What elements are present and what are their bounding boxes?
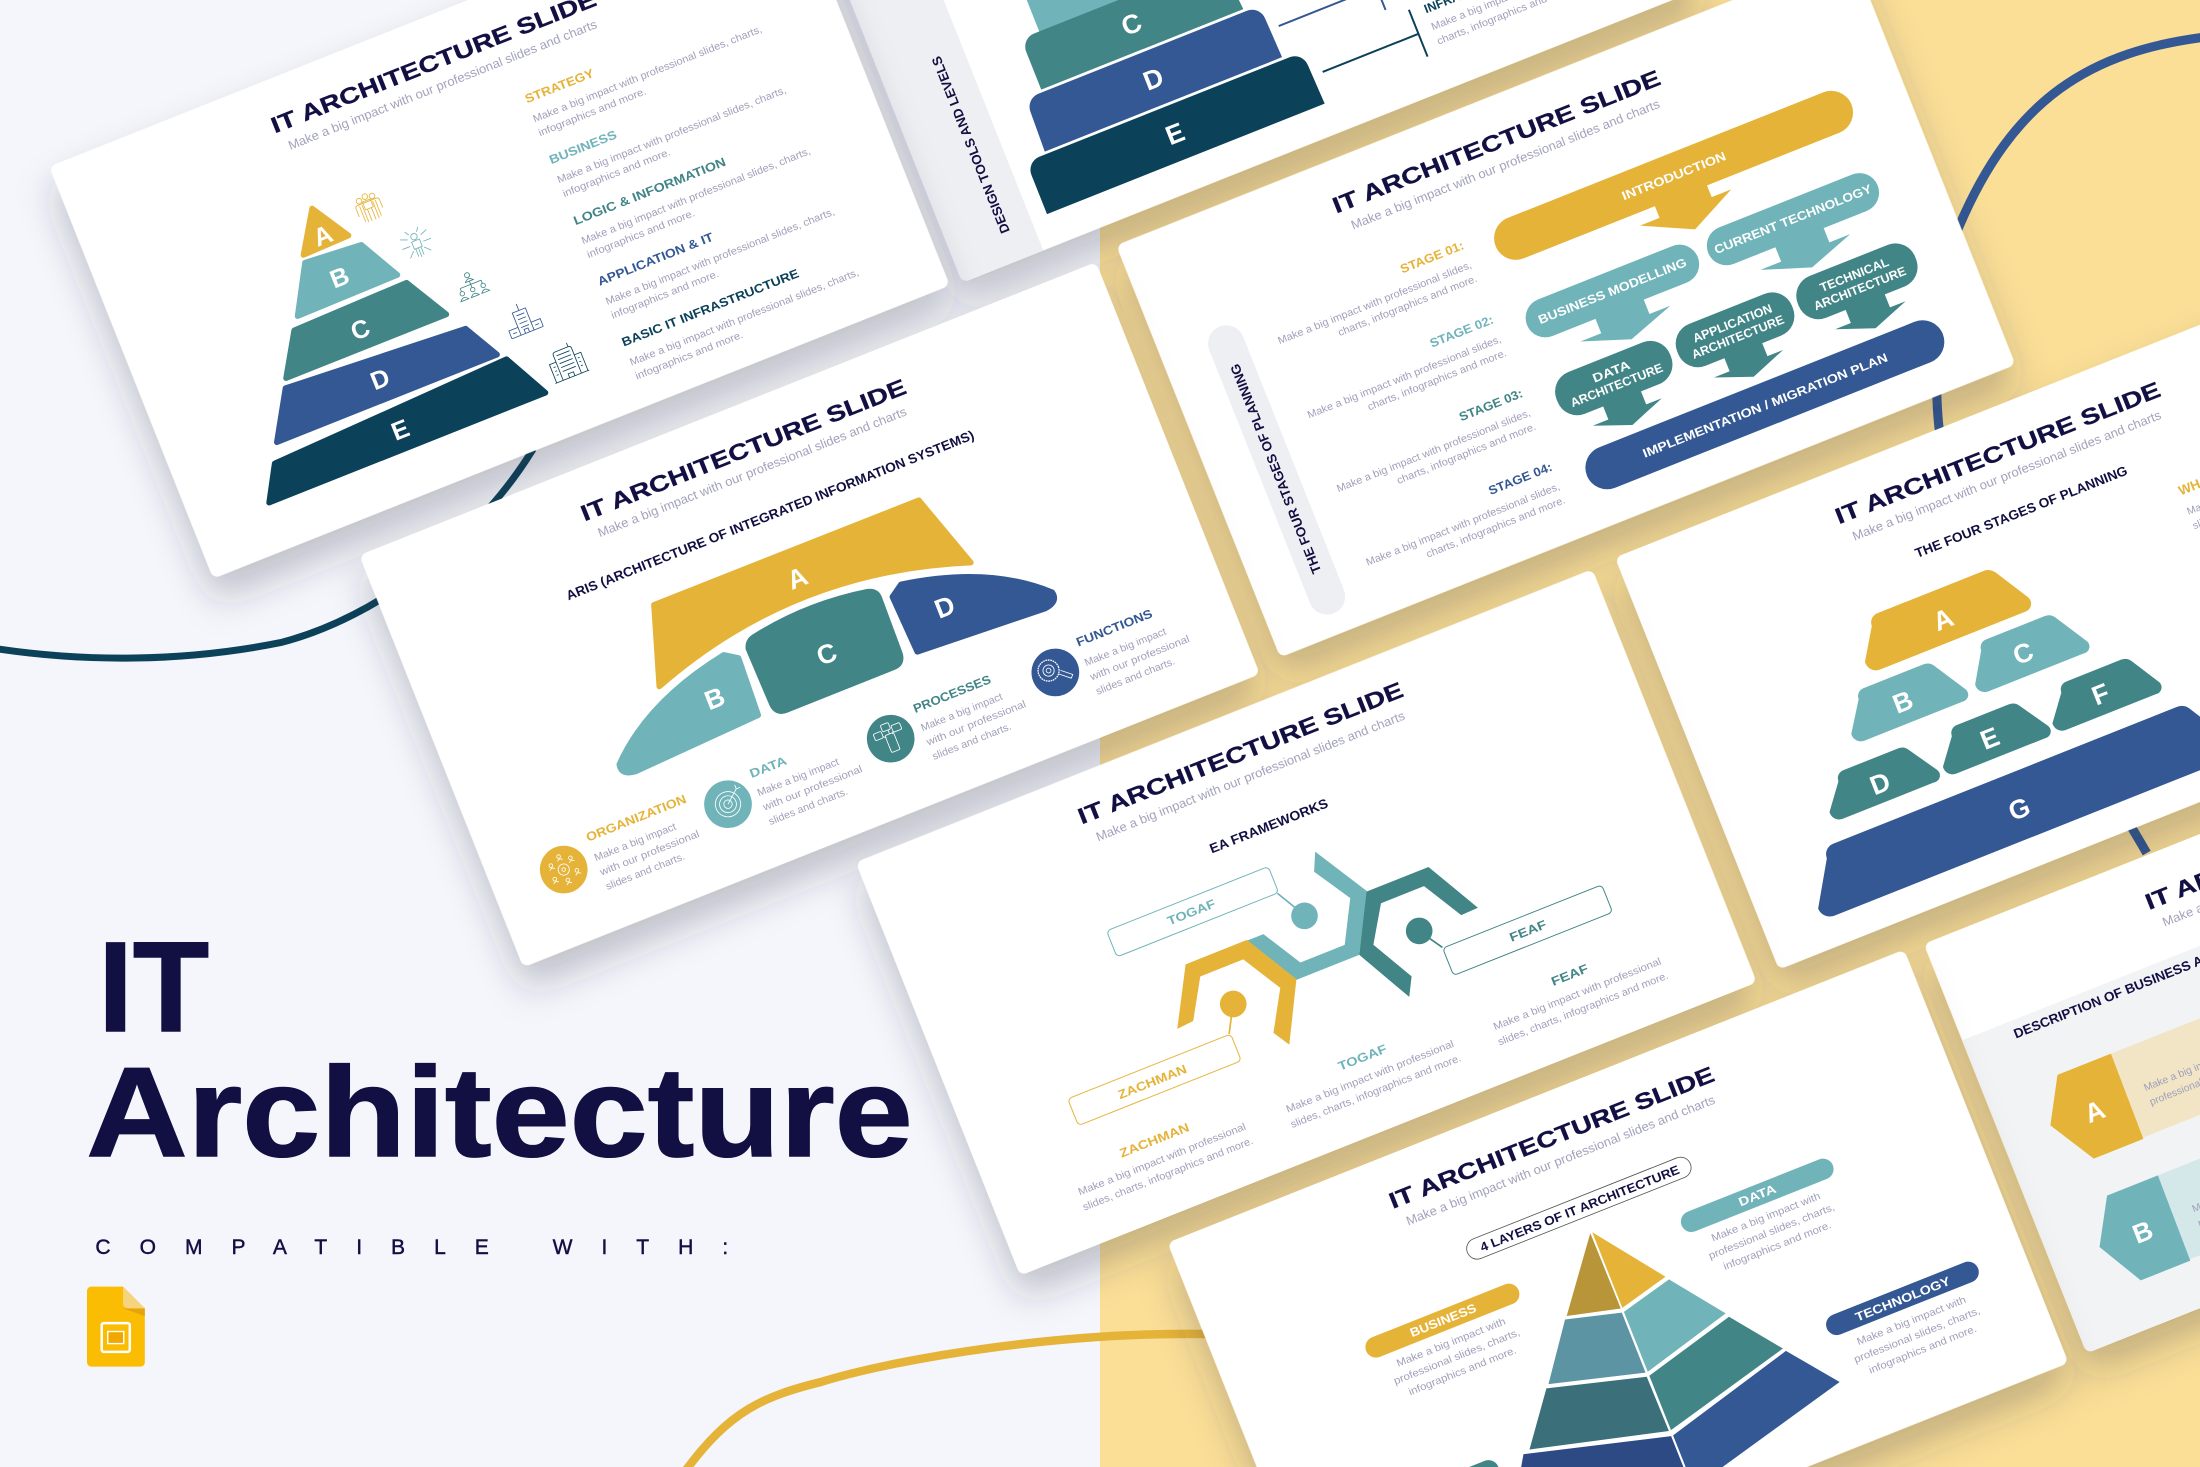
slide subtitle: Make a big impact with our professional slides and charts <box>1349 97 1662 232</box>
icon badge <box>533 839 595 901</box>
block G <box>1798 692 2200 920</box>
side pill <box>1203 320 1351 620</box>
pill: implementation <box>1579 314 1951 496</box>
label: technology <box>1823 1259 2001 1385</box>
panel: design tools and levels slide <box>799 0 1699 283</box>
house diagram <box>569 466 1058 778</box>
letter D: D <box>1139 62 1168 97</box>
letter C: C <box>2009 636 2038 671</box>
letter D: D <box>1866 766 1895 801</box>
heading: STAGE 02: <box>1428 313 1496 351</box>
tier 3 right facet <box>1640 1303 1796 1430</box>
body line 1: Make a big impact with professional slides, <box>1306 334 1503 421</box>
label box: FEAF <box>1443 885 1613 976</box>
block D <box>1817 738 1942 823</box>
label line 1: TECHNICAL <box>1818 255 1891 295</box>
text block: strategy <box>523 2 769 139</box>
heading: LOGIC & INFORMATION <box>571 155 728 228</box>
body line 3: slides and charts. <box>931 721 1013 763</box>
dot <box>1216 987 1251 1021</box>
stage 1 text <box>1268 238 1479 361</box>
panel: four layers slide <box>1168 950 2069 1467</box>
pill text: BUSINESS <box>1408 1301 1478 1340</box>
title line 2: Architecture <box>86 1041 913 1184</box>
body line 1: Make a big impact with <box>1855 1295 1968 1348</box>
decorative curve: blue <box>1937 36 2200 853</box>
letter E: E <box>1161 117 1189 151</box>
text block: application and IT <box>596 185 842 322</box>
panel: four stages flow slide <box>1116 0 2015 657</box>
letter C: C <box>1117 7 1146 42</box>
block F <box>2040 649 2164 734</box>
line <box>1277 887 1304 921</box>
page <box>87 1287 145 1367</box>
slide background <box>1924 651 2200 1353</box>
arrow <box>1830 287 1911 342</box>
body line 2: charts, infographics and more. <box>1396 422 1538 487</box>
item: functions <box>1023 597 1197 718</box>
background: yellow right half <box>1100 0 2200 1467</box>
body line 1: Make a big impact with professional slides, <box>1335 408 1532 495</box>
connector: D <box>1269 0 1386 49</box>
pill <box>1520 239 1705 343</box>
block C <box>1961 605 2092 695</box>
item: organization <box>531 792 708 914</box>
body line 2: with our professional <box>598 829 701 879</box>
slide frame <box>102 1323 130 1352</box>
3D pyramid <box>1428 1168 1856 1467</box>
diagram heading: EA FRAMEWORKS <box>1207 796 1330 856</box>
body line 3: infographics and more. <box>1722 1220 1833 1273</box>
label line 2: ARCHITECTURE <box>1690 313 1786 362</box>
body line 1: Make a big impact with professional slides, <box>1365 482 1562 569</box>
letter A: A <box>310 220 337 253</box>
slide subtitle: Make a big impact with our professional slides and charts <box>596 405 909 540</box>
letter F: F <box>2087 677 2114 711</box>
text block: feaf <box>1482 935 1670 1048</box>
hexagon <box>2034 1054 2145 1169</box>
body line 1: Make a big impact with professional <box>1077 1122 1248 1198</box>
item: data <box>696 729 870 848</box>
body line 2: infographics and more. <box>586 208 697 261</box>
stage 4 text <box>1356 460 1567 582</box>
arrow <box>1708 336 1788 390</box>
icon: people circle <box>544 849 583 889</box>
label: infrastructure <box>1422 0 1633 47</box>
body line 2: charts, infographics and more. <box>1337 274 1479 339</box>
icon badge <box>1024 641 1086 703</box>
diagram heading: THE FOUR STAGES OF PLANNING <box>1913 463 2130 561</box>
tier B <box>1019 0 1203 34</box>
body line 1: Make a big impact <box>593 822 678 864</box>
label line 2: ARCHITECTURE <box>1812 264 1908 313</box>
icon: magnifier <box>1035 653 1074 689</box>
panel: description of business architecture slide <box>1924 651 2200 1353</box>
tier B <box>280 233 398 316</box>
slide subtitle: Make a big impact with our professional slides and charts <box>1850 408 2163 544</box>
diagram heading: ARIS (ARCHITECTURE OF INTEGRATED INFORMATION SYSTEMS) <box>564 427 976 603</box>
letter B: B <box>700 681 729 716</box>
slide title: IT ARCHITECTURE SLIDE <box>577 374 910 526</box>
label line 2: ARCHITECTURE <box>1569 361 1665 410</box>
body line 1: Make a big impact <box>1083 627 1168 669</box>
body line 2: slides, charts, infographics and more. <box>1289 1053 1463 1131</box>
stage 2 text <box>1297 313 1509 435</box>
pill arrow: business modelling <box>1520 239 1717 373</box>
slide background <box>1116 0 2015 657</box>
fold <box>123 1287 145 1308</box>
tier C <box>1021 0 1243 90</box>
slide title: IT ARCHITECTURE SLIDE <box>1385 1062 1718 1214</box>
fold shade <box>123 1308 145 1316</box>
letter C: C <box>347 314 374 346</box>
pyramid <box>174 154 545 503</box>
body line 2: charts, infographics and more. <box>1366 348 1509 413</box>
letter D: D <box>930 590 959 625</box>
body line 2: professional slides, charts, <box>1707 1202 1836 1262</box>
hex connector diagram <box>1135 803 1499 1081</box>
block D <box>889 533 1057 659</box>
body line 2: with our professional <box>1088 634 1191 684</box>
decorative curve: dark teal <box>0 449 533 658</box>
grey band <box>1962 747 2200 1353</box>
label: FEAF: FEAF <box>1507 917 1549 945</box>
pill arrow: current technology <box>1701 167 1897 301</box>
label: TOGAF: TOGAF <box>1165 896 1218 928</box>
arrow <box>1635 176 1740 248</box>
block A <box>1850 559 2034 674</box>
letter E: E <box>1976 721 2004 756</box>
body line 2: slides, charts, infographics and more. <box>1081 1136 1255 1214</box>
body line 3: slides and charts. <box>767 787 850 828</box>
body line 3: slides and charts. <box>1095 656 1177 698</box>
heading: BASIC IT INFRASTRUCTURE <box>620 266 801 349</box>
slide subtitle: Make a big impact with our professional slides and charts <box>1404 1093 1717 1228</box>
label: business <box>1362 1280 1541 1407</box>
letter: A <box>2080 1094 2109 1129</box>
body line 1: Make a big impact with professional slides, charts, <box>628 268 861 369</box>
pill <box>1549 335 1679 421</box>
text block: what is <box>2176 442 2200 532</box>
heading: APPLICATION & IT <box>596 230 716 289</box>
heading pill text: 4 LAYERS OF IT ARCHITECTURE <box>1478 1163 1682 1255</box>
icon: building <box>501 298 543 339</box>
slide title: IT ARCHITECTURE SLIDE <box>1831 377 2164 529</box>
arrow <box>1587 384 1667 439</box>
body line 2: charts, infographics and more. <box>1425 495 1567 561</box>
label: INTRODUCTION <box>1620 149 1728 203</box>
heading: TOGAF <box>1336 1041 1389 1074</box>
tier 4 right facet <box>1659 1337 1856 1467</box>
body line 1: Make a big impact with professional slides, charts, <box>604 207 836 308</box>
heading: FEAF <box>1549 961 1591 989</box>
letter B: B <box>326 262 353 294</box>
body line 1: Make a big impact <box>920 692 1005 734</box>
pill text: DATA <box>1736 1182 1778 1209</box>
row A <box>2034 900 2200 1169</box>
heading: STAGE 03: <box>1457 386 1525 424</box>
slide inner <box>108 1332 124 1344</box>
text block: basic IT infrastructure <box>620 246 866 383</box>
stage 3 text <box>1327 386 1538 509</box>
icon: person with arrows <box>397 224 436 263</box>
body line 2: with our professional <box>924 699 1028 749</box>
slide title: IT ARCHITECTURE SLIDE <box>267 0 600 138</box>
slide title: IT ARCHITECTURE SLIDE <box>1074 677 1407 829</box>
heading: DATA <box>748 754 789 781</box>
letter: B <box>2128 1215 2157 1250</box>
body line 2: slides, charts, infographics and more. <box>1497 971 1670 1048</box>
heading: STAGE 04: <box>1486 460 1554 498</box>
slide background <box>856 569 1757 1276</box>
letter A: A <box>1929 602 1958 637</box>
body line 2: infographics and more. <box>610 269 721 322</box>
tier E <box>1026 51 1325 214</box>
label: CURRENT TECHNOLOGY <box>1712 181 1875 257</box>
block E <box>1930 693 2053 777</box>
tier 2 left facet <box>1529 1299 1646 1408</box>
teal hexagon <box>1225 839 1388 992</box>
dark teal hexagon <box>1339 856 1499 1008</box>
body line 1: Make a big impact with <box>1395 1316 1508 1370</box>
dot <box>1287 899 1322 933</box>
panel: five-level pyramid slide <box>49 0 950 579</box>
pill arrow: introduction <box>1488 84 1873 300</box>
row B <box>2083 1021 2200 1290</box>
connector: TOGAF <box>1277 882 1322 934</box>
panel: EA frameworks slide <box>856 569 1757 1276</box>
body line 1: Make a big impact with professional <box>1492 956 1663 1033</box>
body line 1: Make a big impact with professional slides, charts, <box>556 85 788 186</box>
tier D <box>1024 5 1282 152</box>
panel: four stages pyramid slide <box>1615 264 2200 969</box>
body line 1: Make a big impact with professional slides, charts, <box>580 146 812 247</box>
heading: FUNCTIONS <box>1074 607 1155 649</box>
label: data <box>1678 1155 1855 1282</box>
side pill heading: THE FOUR STAGES OF PLANNING <box>1227 362 1324 576</box>
pill arrow: data architecture <box>1549 335 1689 448</box>
slide background <box>359 262 1260 967</box>
text block: zachman <box>1067 1100 1255 1214</box>
icon badge <box>860 708 922 770</box>
pill <box>1362 1280 1523 1361</box>
heading: STRATEGY <box>523 66 597 106</box>
arrow <box>1574 290 1677 357</box>
body line 3: infographics and more. <box>1868 1324 1979 1377</box>
line <box>1419 925 1442 953</box>
tier 4 left facet <box>1495 1401 1692 1467</box>
tier D <box>259 311 497 442</box>
stepped pyramid <box>962 0 1325 214</box>
icon: phone with chat boxes <box>871 719 909 757</box>
band <box>2107 900 2200 1139</box>
letter E: E <box>387 414 413 447</box>
tier 2 right facet <box>1619 1265 1735 1372</box>
connector: E <box>1313 10 1428 95</box>
slide background <box>1168 950 2069 1467</box>
text block: business <box>547 63 794 200</box>
heading: ORGANIZATION <box>584 792 688 845</box>
line <box>1219 1004 1243 1034</box>
slide background <box>1615 264 2200 969</box>
sidebar heading: DESIGN TOOLS AND LEVELS <box>929 54 1013 236</box>
heading: STAGE 01: <box>1398 238 1466 276</box>
heading pill <box>1464 1154 1694 1262</box>
block A <box>631 490 971 687</box>
letter B: B <box>1888 685 1917 720</box>
pill label: implementation: IMPLEMENTATION / MIGRATION PLAN <box>1641 351 1890 461</box>
tier A <box>289 200 349 255</box>
pill <box>1488 84 1860 266</box>
icon badge <box>697 773 759 835</box>
background: pale left half <box>0 0 1100 1467</box>
text block: togaf <box>1275 1017 1463 1131</box>
icon: Google Slides <box>87 1287 145 1367</box>
block pyramid <box>1725 508 2200 920</box>
body line 3: infographics and more. <box>1407 1345 1518 1398</box>
band <box>2155 1021 2200 1260</box>
compatible with label: COMPATIBLE WITH: <box>95 1236 728 1259</box>
body line 3: slides and charts. <box>604 851 687 893</box>
item: processes <box>859 664 1033 784</box>
letter G: G <box>2004 791 2035 827</box>
label box: ZACHMAN <box>1068 1034 1241 1126</box>
body line 2: infographics and more. <box>634 330 745 383</box>
gold hexagon <box>1156 928 1318 1081</box>
slide subtitle: Make a big impact with our professional slides and charts <box>1094 709 1407 844</box>
dot <box>1402 914 1437 948</box>
body line 1: Make a big impact <box>756 757 841 799</box>
body line 2: professional slides, charts, <box>1392 1327 1522 1387</box>
tier 3 left facet <box>1511 1352 1669 1467</box>
pill <box>1669 286 1801 373</box>
panel: ARIS slide <box>359 262 1260 967</box>
slide title: IT ARCHITECTURE SLIDE <box>1329 65 1664 218</box>
label: ZACHMAN: ZACHMAN <box>1116 1062 1189 1102</box>
text block: logic and information <box>571 124 818 261</box>
body line 1: Make a big impact with <box>1710 1191 1823 1244</box>
pill <box>1823 1259 1982 1338</box>
icon: org chart <box>452 267 490 302</box>
tier E <box>252 350 545 503</box>
hexagon <box>2083 1175 2192 1290</box>
body line 1: Make a big impact with professional slides, charts, <box>532 24 764 125</box>
label line 1: DATA <box>1590 358 1632 386</box>
body line 1: Make a big impact with professional slides, <box>1276 260 1473 347</box>
slide background <box>49 0 950 579</box>
tier C <box>270 273 446 378</box>
pill arrow: application architecture <box>1669 286 1811 400</box>
icon: target <box>711 783 749 821</box>
pill <box>1678 1155 1837 1235</box>
body line 2: infographics and more. <box>537 86 648 139</box>
connector: ZACHMAN <box>1214 987 1255 1034</box>
sidebar <box>799 0 1043 283</box>
top left facet <box>1541 1233 1621 1328</box>
label box: TOGAF <box>1107 867 1279 957</box>
heading: PROCESSES <box>911 672 993 716</box>
label pill: application <box>1342 1457 1502 1467</box>
body line 2: infographics and more. <box>561 147 672 200</box>
pill <box>1790 237 1924 326</box>
connector: FEAF <box>1402 913 1442 958</box>
decorative curve: gold <box>685 1334 1221 1467</box>
title line 1: IT <box>98 916 209 1059</box>
letter D: D <box>367 363 394 396</box>
block C <box>739 580 909 718</box>
letter C: C <box>812 637 841 672</box>
block B <box>596 650 763 776</box>
arrow <box>1754 218 1856 286</box>
slide background <box>799 0 1699 283</box>
pill text: TECHNOLOGY <box>1853 1274 1953 1324</box>
body line 2: professional slides, charts, <box>1853 1306 1982 1366</box>
main title <box>86 916 913 1184</box>
body line 1: Make a big impact with professional <box>1285 1039 1456 1116</box>
heading: BUSINESS <box>547 128 619 167</box>
label line 1: APPLICATION <box>1691 301 1774 346</box>
block B <box>1837 653 1970 744</box>
icon: office tower <box>543 339 589 383</box>
slide subtitle: Make a big impact with our professional slides and charts <box>286 17 599 153</box>
heading: ZACHMAN <box>1118 1120 1191 1161</box>
pill <box>1701 167 1885 271</box>
icon: people group <box>352 189 386 225</box>
pill arrow: technical architecture <box>1790 237 1934 352</box>
label: BUSINESS MODELLING <box>1536 255 1689 327</box>
letter A: A <box>783 561 812 596</box>
top right facet <box>1592 1213 1670 1308</box>
body line 2: with our professional <box>761 764 864 814</box>
